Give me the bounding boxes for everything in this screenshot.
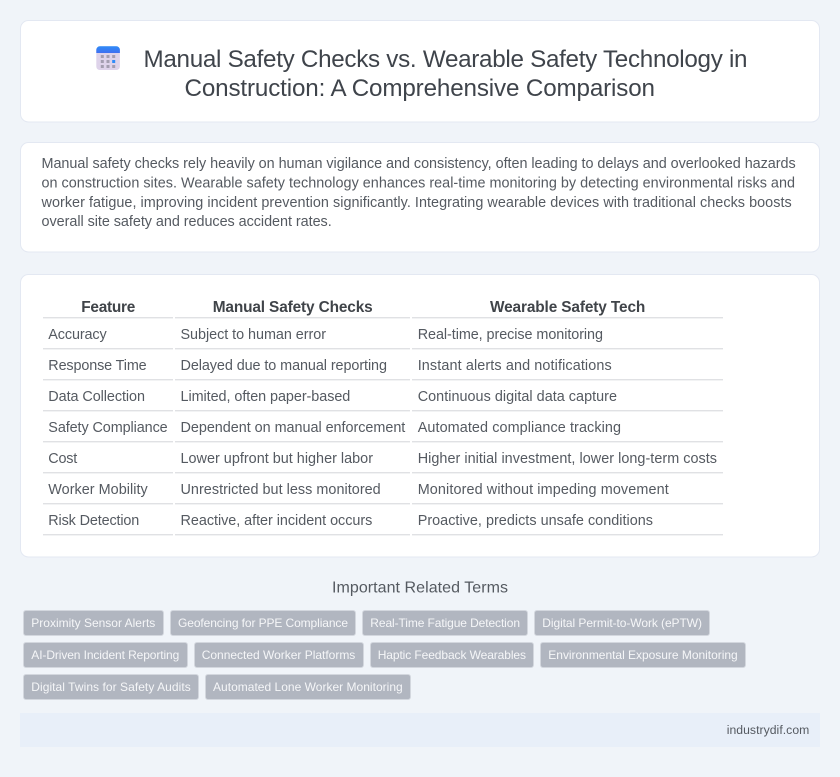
- tags: related terms: [24, 610, 746, 700]
- heading: important related terms: Important Related Terms: [332, 580, 508, 597]
- row: accuracy: Real-time, precise monitoring: [418, 327, 603, 343]
- icon: calendar: [96, 46, 120, 70]
- intro paragraph: on construction sites. Wearable safety technology enhances real-time monitoring by detecting environmental risks and: [42, 176, 795, 192]
- tag: geofencing: [170, 610, 356, 636]
- row: response time: [43, 358, 723, 380]
- row: response time: Response Time: [48, 358, 147, 374]
- footer: industrydif.com: [727, 723, 809, 737]
- row: cost: Lower upfront but higher labor: [180, 451, 373, 467]
- row: accuracy: Accuracy: [48, 327, 107, 343]
- tag: geofencing: Geofencing for PPE Compliance: [178, 616, 348, 630]
- row: worker mobility: Unrestricted but less monitored: [180, 482, 381, 498]
- tag: haptic feedback: [370, 642, 534, 668]
- intro paragraph: Manual safety checks rely heavily on human vigilance and consistency, often leading to delays and overlooked hazards: [42, 156, 796, 172]
- tag: digital twins: [24, 674, 198, 700]
- tag: digital permit: Digital Permit-to-Work (ePTW): [542, 616, 702, 630]
- tag: proximity sensor alerts: [24, 610, 164, 636]
- row: worker mobility: [43, 482, 723, 504]
- row: response time: Delayed due to manual reporting: [180, 358, 387, 374]
- tag: incident reporting: AI-Driven Incident Reporting: [31, 648, 179, 662]
- panel: introduction: [20, 142, 820, 252]
- row: risk detection: Risk Detection: [48, 513, 139, 529]
- footer: [20, 713, 820, 747]
- tag: fatigue detection: Real-Time Fatigue Detection: [370, 616, 520, 630]
- row: safety compliance: [43, 420, 723, 442]
- tag: connected worker: Connected Worker Platforms: [202, 648, 355, 662]
- tag: haptic feedback: Haptic Feedback Wearables: [378, 648, 526, 662]
- row: risk detection: Proactive, predicts unsafe conditions: [418, 513, 653, 529]
- table header row: Manual Safety Checks: [213, 299, 373, 316]
- row: data collection: Limited, often paper-based: [180, 389, 350, 405]
- title text: [144, 46, 748, 102]
- tag: proximity sensor alerts: Proximity Sensor Alerts: [31, 616, 155, 630]
- row: worker mobility: Monitored without impeding movement: [418, 482, 669, 498]
- table header row: Feature: [81, 299, 136, 316]
- tag: fatigue detection: [362, 610, 528, 636]
- tag: environmental exposure: [540, 642, 746, 668]
- row: accuracy: [43, 327, 723, 349]
- panel: comparison table: [20, 274, 820, 557]
- row: risk detection: [43, 513, 723, 535]
- row: safety compliance: Safety Compliance: [48, 420, 168, 436]
- title text: Manual Safety Checks vs. Wearable Safety Technology in: [144, 46, 748, 73]
- tag: connected worker: [194, 642, 364, 668]
- tag: digital twins: Digital Twins for Safety Audits: [31, 680, 191, 694]
- intro paragraph: overall site safety and reduces accident rates.: [42, 214, 332, 230]
- table header row: Wearable Safety Tech: [490, 299, 645, 316]
- panel: title header: [20, 20, 820, 122]
- tag: incident reporting: [24, 642, 188, 668]
- row: data collection: [43, 389, 723, 411]
- row: cost: Cost: [48, 451, 77, 467]
- row: response time: Instant alerts and notifications: [418, 358, 612, 374]
- tag: environmental exposure: Environmental Exposure Monitoring: [548, 648, 738, 662]
- row: risk detection: Reactive, after incident occurs: [180, 513, 372, 529]
- row: data collection: Continuous digital data capture: [418, 389, 617, 405]
- table header row: [43, 299, 723, 318]
- tag: lone worker: [206, 674, 410, 700]
- row: worker mobility: Worker Mobility: [48, 482, 148, 498]
- tag: digital permit: [534, 610, 710, 636]
- row: cost: [43, 451, 723, 473]
- tag: lone worker: Automated Lone Worker Monitoring: [213, 680, 403, 694]
- row: safety compliance: Automated compliance tracking: [418, 420, 621, 436]
- intro paragraph: worker fatigue, improving incident prevention significantly. Integrating wearable devices with traditional checks boosts: [40, 195, 792, 211]
- title text: Construction: A Comprehensive Comparison: [184, 75, 655, 102]
- row: safety compliance: Dependent on manual enforcement: [180, 420, 405, 436]
- row: data collection: Data Collection: [48, 389, 145, 405]
- intro paragraph: [40, 156, 796, 230]
- row: accuracy: Subject to human error: [180, 327, 326, 343]
- row: cost: Higher initial investment, lower long-term costs: [418, 451, 717, 467]
